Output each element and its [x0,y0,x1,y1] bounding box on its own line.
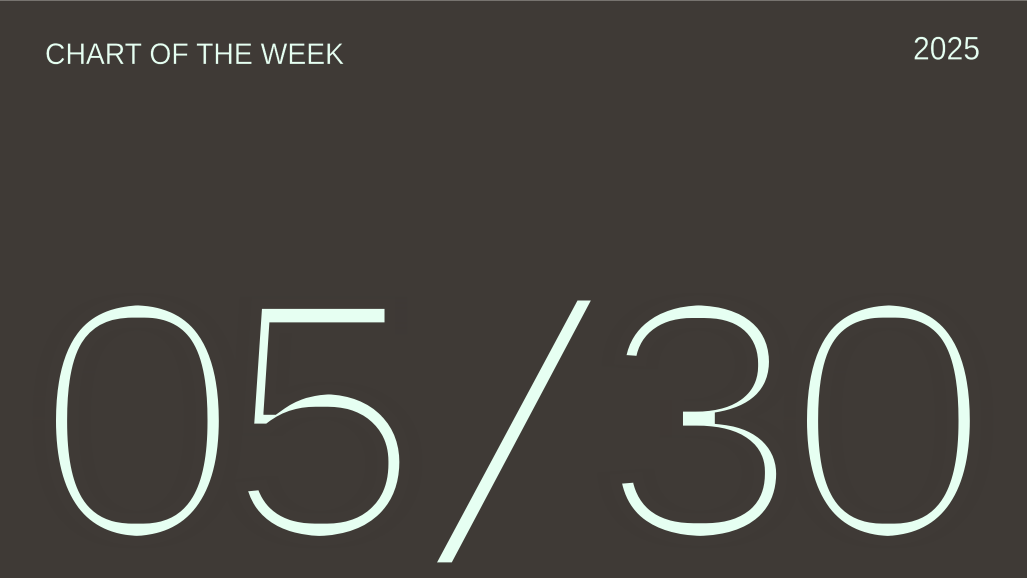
large date: 05/30 [29,290,997,578]
year: 2025 [913,30,980,66]
title: CHART OF THE WEEK [45,38,344,71]
